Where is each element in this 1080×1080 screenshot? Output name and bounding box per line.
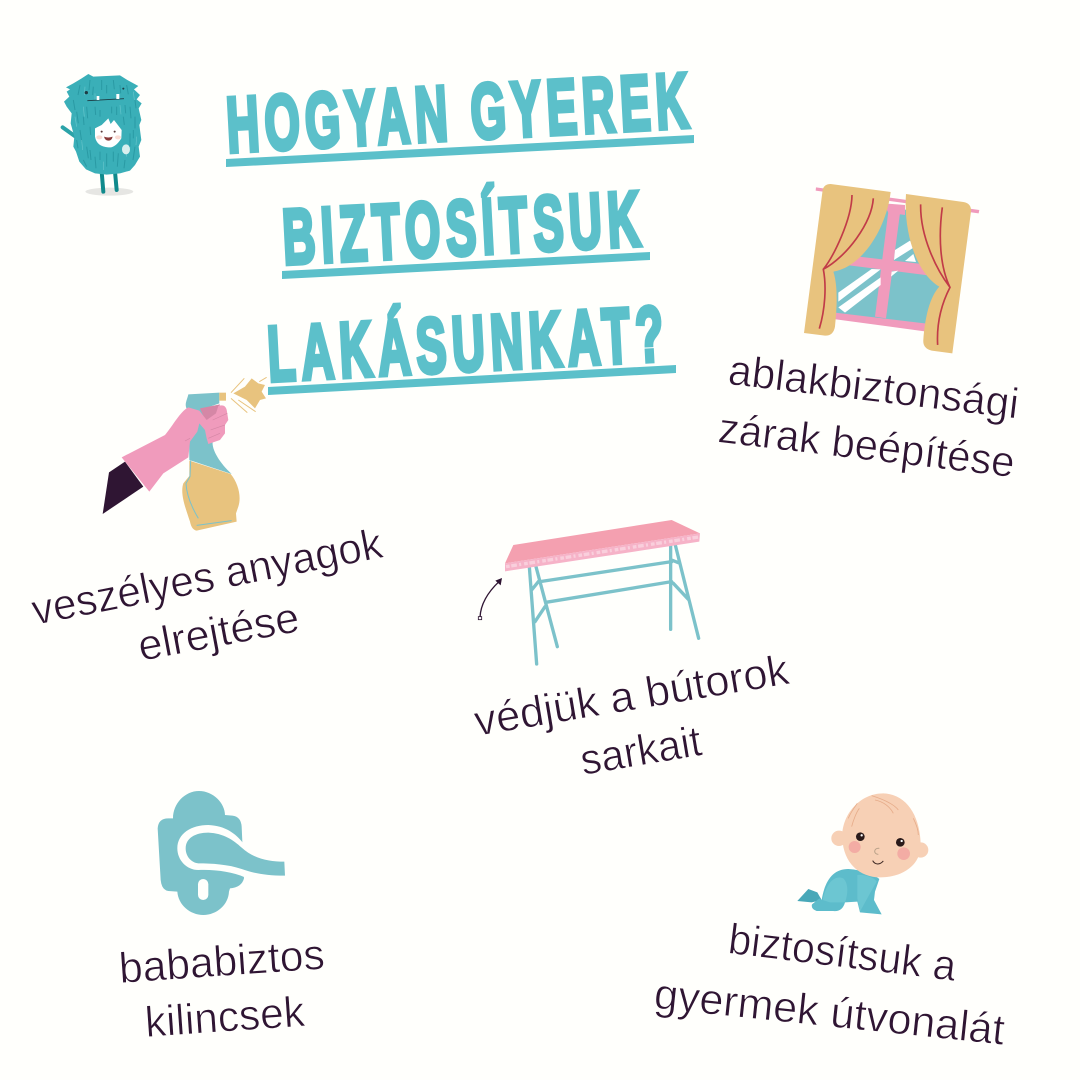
text: protect furniture corners: védjük a bútorok [471,646,793,746]
text: hide dangerous materials: veszélyes anyagok [28,520,387,635]
icon: spray bottle with gloved hand [103,377,267,531]
text: secure the child's path [652,915,1007,1055]
text: protect furniture corners: sarkait [577,717,705,785]
title [224,56,694,398]
icon: teal furry monster mascot [63,74,142,196]
title: BIZTOSÍTSUK [280,174,642,281]
text: childproof handles [117,931,326,1047]
text: window locks: zárak beépítése [716,404,1017,487]
icon: table with protected corner [478,520,700,664]
icon: crawling baby [797,793,928,914]
text: childproof handles: kilincsek [143,988,307,1047]
icon: window with curtains [804,184,979,353]
text: hide dangerous materials: elrejtése [134,594,303,671]
arrow: points to table corner [478,578,502,620]
text: secure the child's path: biztosítsuk a [726,915,959,991]
text: childproof handles: bababiztos [117,931,326,993]
text: secure the child's path: gyermek útvonalát [652,970,1007,1055]
title: HOGYAN GYEREK [224,56,691,169]
title: LAKÁSUNKAT? [265,289,665,398]
text: window locks [716,346,1021,487]
text: window locks: ablakbiztonsági [726,346,1021,429]
icon: childproof door handle [158,791,285,915]
